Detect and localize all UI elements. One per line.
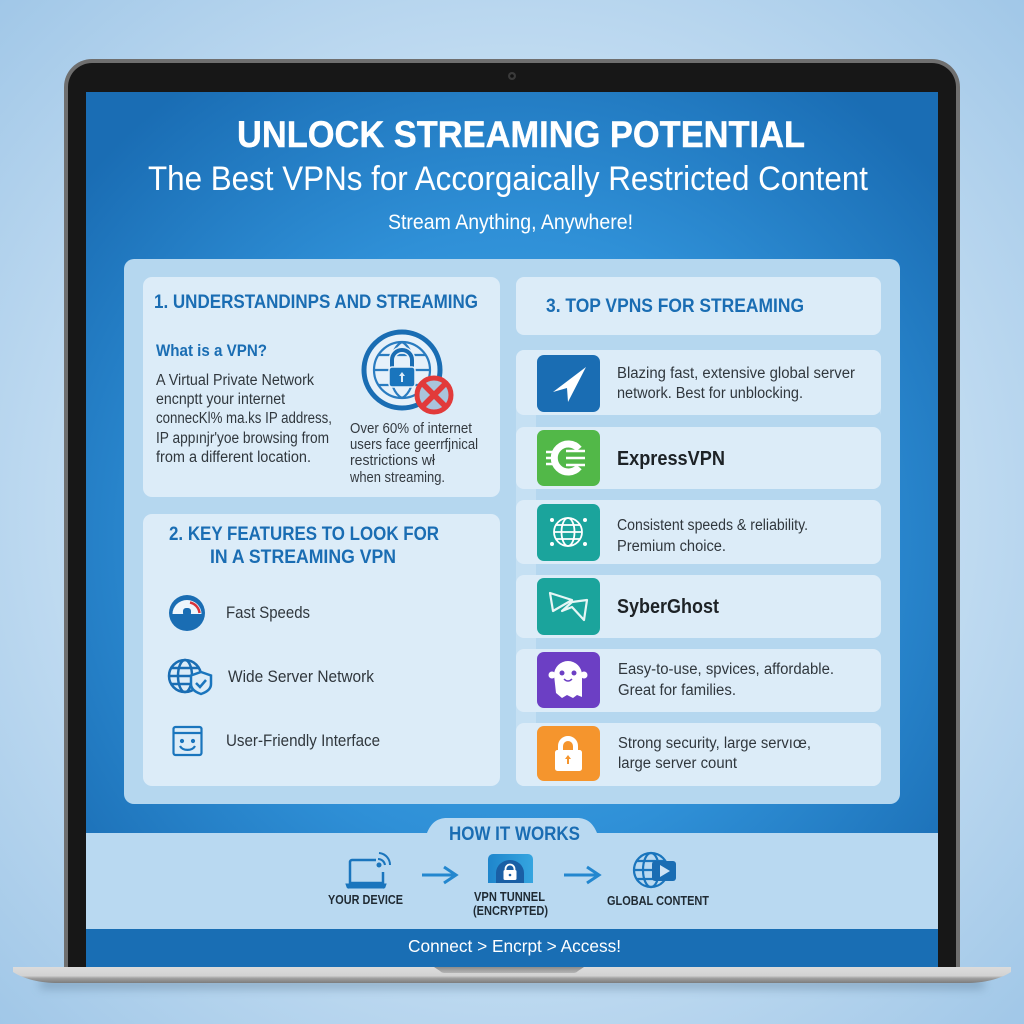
icon: globe lock blocked [364, 332, 451, 412]
heading 2: 2. KEY FEATURES TO LOOK FOR [169, 523, 439, 545]
row 2 [516, 427, 881, 489]
row 3: Consistent speeds & reliability. [617, 517, 808, 534]
icon: laptop wifi [346, 853, 390, 888]
statistic text: restrictions wł [350, 453, 436, 469]
VPN description [156, 372, 332, 466]
icon: globe network [537, 504, 600, 561]
icon: friendly window [174, 727, 202, 755]
arrow 2 [564, 867, 599, 883]
row 4 [516, 575, 881, 638]
statistic text [349, 421, 478, 486]
row 6 [516, 723, 881, 786]
tagline: Stream Anything, Anywhere! [388, 211, 633, 234]
subtitle: The Best VPNs for Accorgaically Restricted Content [148, 160, 868, 198]
VPN description: A Virtual Private Network [156, 372, 314, 389]
icon: ghost [537, 652, 600, 708]
laptop frame [64, 59, 960, 967]
feature: fast speeds: Fast Speeds [226, 604, 310, 622]
row 3 [516, 500, 881, 564]
feature: interface: User-Friendly Interface [226, 732, 380, 750]
row 5: Great for families. [618, 682, 736, 699]
icon: globe shield [169, 660, 211, 694]
VPN description: encnptt your internet [156, 391, 286, 408]
icon: expressvpn [537, 430, 600, 486]
VPN description: IP appınjr'yoe browsing from [156, 430, 329, 447]
label: your device: YOUR DEVICE [328, 892, 403, 907]
panel: top VPNs heading [516, 277, 881, 335]
heading 2 [169, 523, 439, 568]
footer bar: Connect > Encrpt > Access! [408, 936, 621, 956]
label: vpn tunnel: (ENCRYPTED) [473, 903, 548, 918]
how it works heading: HOW IT WORKS [449, 823, 580, 845]
subheading: What is a VPN? [156, 342, 267, 360]
icon: wings [537, 578, 600, 635]
panel: VPN list [516, 350, 881, 786]
row 2: ExpressVPN [617, 447, 725, 470]
footer bar [86, 929, 938, 967]
icon: padlock [537, 726, 600, 781]
label: vpn tunnel: VPN TUNNEL [474, 889, 545, 904]
label: global content: GLOBAL CONTENT [607, 893, 709, 908]
statistic text: when streaming. [349, 470, 445, 486]
title: UNLOCK STREAMING POTENTIAL [237, 114, 805, 155]
panel: top VPNs heading: 3. TOP VPNS FOR STREAMING [546, 295, 804, 317]
row 1: network. Best for unblocking. [617, 385, 803, 402]
row 3: Premium choice. [617, 538, 726, 555]
row 1: Blazing fast, extensive global server [617, 365, 855, 382]
VPN description: connecKl% ma.ks IP address, [156, 410, 332, 427]
laptop base [13, 967, 1011, 988]
label: vpn tunnel [473, 889, 548, 918]
heading 1: 1. UNDERSTANDINPS AND STREAMING [154, 291, 478, 313]
main panel [124, 259, 900, 804]
panel: understanding [143, 277, 500, 497]
screen [86, 92, 938, 967]
arrow 1 [422, 867, 456, 883]
icon: vpn tunnel [488, 854, 533, 883]
panel: how it works [86, 818, 938, 929]
row 5 [516, 649, 881, 712]
feature: server network: Wide Server Network [228, 668, 375, 686]
VPN description: from a different location. [156, 449, 311, 466]
panel: key features [143, 514, 500, 786]
row 6: large server count [618, 755, 738, 772]
row 1 [516, 350, 881, 415]
row 5: Easy-to-use, spvices, affordable. [618, 661, 834, 678]
statistic text: Over 60% of internet [350, 421, 472, 437]
statistic text: users face geerrfjnical [350, 437, 478, 453]
row 4: SyberGhost [617, 595, 719, 618]
header [148, 114, 868, 234]
row 6: Strong security, large servıœ, [618, 735, 811, 752]
icon: globe video [634, 853, 676, 887]
icon: speedometer [169, 595, 205, 631]
icon: compass arrow [537, 355, 600, 412]
heading 2: IN A STREAMING VPN [210, 546, 396, 568]
